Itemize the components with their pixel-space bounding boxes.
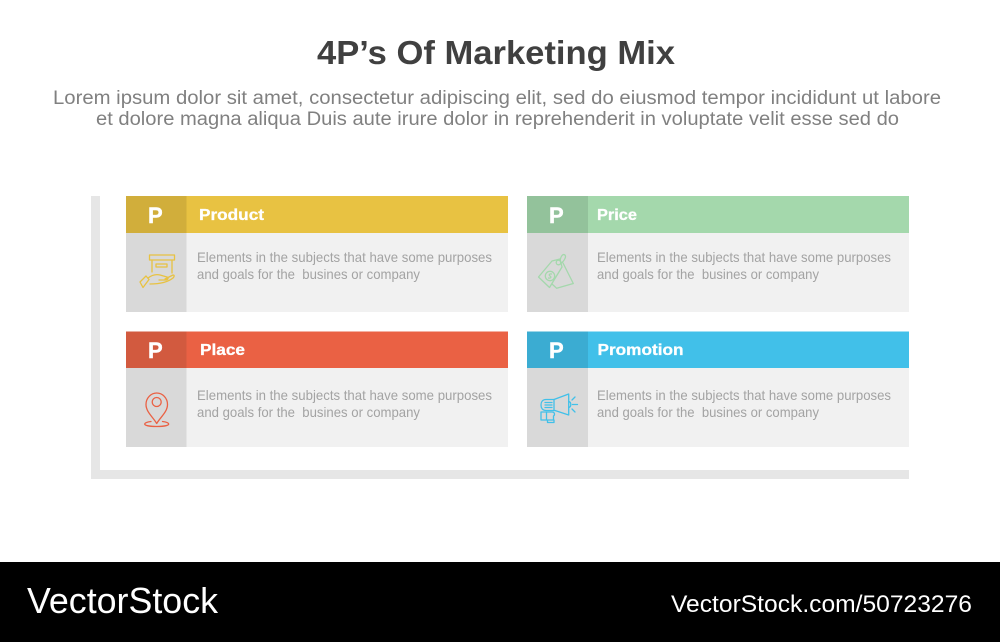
subtitle text block: Lorem ipsum dolor sit amet, consectetur adipiscing elit, sed do eiusmod tempor incididunt ut labore — [53, 88, 941, 109]
icon: price tags — [538, 254, 573, 288]
icon: megaphone — [541, 394, 578, 422]
description: place — [197, 387, 492, 420]
heading: product: Product — [199, 207, 265, 224]
description: promotion: Elements in the subjects that have some purposes — [597, 387, 891, 403]
description: price: and goals for the busines or company — [597, 266, 819, 282]
panel: product: P — [148, 203, 163, 228]
description: promotion: and goals for the busines or company — [597, 404, 819, 420]
panel: product — [126, 196, 508, 312]
footer image id: VectorStock.com/50723276 — [671, 591, 972, 618]
heading: price: Price — [597, 207, 637, 224]
panel: promotion — [527, 332, 909, 447]
panel: place — [126, 332, 508, 447]
panel: place: P — [148, 338, 163, 363]
panel: price — [527, 196, 909, 312]
description: product: Elements in the subjects that have some purposes — [197, 249, 492, 265]
L-shaped frame — [91, 196, 909, 479]
panel: price: P — [549, 203, 564, 228]
heading: promotion: Promotion — [598, 342, 684, 359]
heading: place: Place — [200, 342, 245, 359]
description: product: and goals for the busines or company — [197, 266, 420, 282]
icon: map pin — [145, 393, 169, 426]
subtitle text block — [53, 88, 941, 130]
description: place: and goals for the busines or company — [197, 404, 420, 420]
description: price: Elements in the subjects that have some purposes — [597, 249, 891, 265]
panel: promotion: P — [549, 338, 564, 363]
description: price — [597, 249, 891, 282]
description: promotion — [597, 387, 891, 420]
description: place: Elements in the subjects that have some purposes — [197, 387, 492, 403]
description: product — [197, 249, 492, 282]
subtitle text block: et dolore magna aliqua Duis aute irure dolor in reprehenderit in voluptate velit esse sed do — [96, 109, 899, 130]
footer logo text: VectorStock — [27, 580, 219, 621]
icon: box in hand — [140, 255, 174, 288]
title: 4P’s Of Marketing Mix — [317, 34, 676, 71]
footer bar — [0, 562, 1000, 642]
